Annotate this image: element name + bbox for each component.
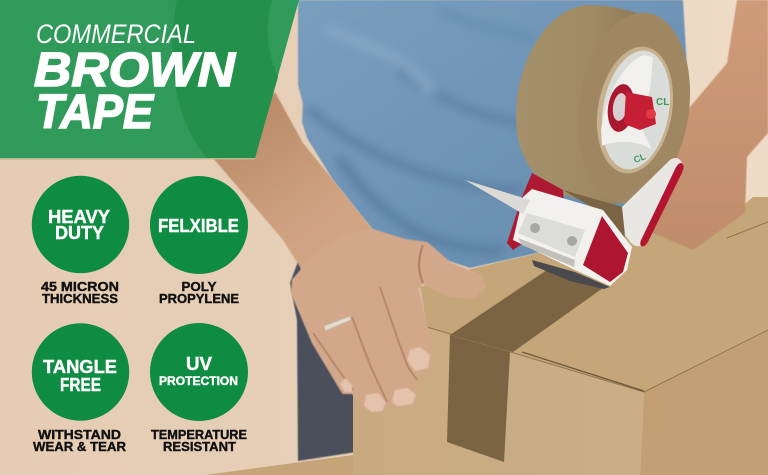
dispenser handle (622, 158, 682, 246)
badge: tangle free (32, 323, 129, 421)
box right face (640, 330, 768, 475)
blue shirt (298, 0, 690, 268)
green banner (0, 0, 299, 160)
core print: CL (656, 97, 669, 108)
hub red (605, 82, 637, 134)
caption: withstand wear and tear: WEAR & TEAR (33, 439, 127, 454)
badge: flexible: FELXIBLE (158, 216, 239, 236)
badge: heavy duty: HEAVY (48, 207, 110, 227)
tape roll: CL (632, 151, 647, 165)
caption: 45 micron thickness: 45 MICRON (41, 279, 119, 294)
caption: poly propylene: PROPYLENE (159, 291, 239, 306)
dispenser blade (465, 180, 530, 214)
left forearm (213, 92, 405, 300)
caption: temperature resistant: TEMPERATURE (151, 427, 247, 442)
box top face (420, 197, 768, 392)
back cardboard box piece (205, 455, 356, 475)
caption: 45 micron thickness (41, 279, 119, 306)
caption: withstand wear and tear: WITHSTAND (38, 427, 121, 442)
caption: withstand wear and tear (33, 427, 127, 454)
caption: poly propylene (159, 279, 239, 306)
tape roll (516, 5, 702, 211)
badge: heavy duty (32, 176, 129, 273)
trousers (290, 256, 356, 461)
caption: poly propylene: POLY (182, 279, 217, 294)
badge: uv protection: PROTECTION (159, 374, 238, 388)
brown tape strip (447, 270, 603, 462)
title: COMMERCIAL (36, 19, 196, 49)
badge: uv protection (150, 323, 248, 421)
caption: 45 micron thickness: THICKNESS (42, 291, 118, 306)
caption: temperature resistant (151, 427, 247, 454)
left hand (292, 230, 485, 413)
roll core (587, 41, 683, 179)
badge: tangle free: FREE (60, 375, 101, 395)
roll front (566, 5, 702, 211)
wedding ring (324, 316, 351, 331)
badge: flexible (150, 176, 248, 274)
badge: tangle free: TANGLE (43, 357, 117, 377)
box front face (353, 327, 644, 475)
title (34, 19, 236, 139)
badge: uv protection: UV (186, 354, 212, 374)
dispenser tape feed (563, 190, 625, 240)
title: BROWN (34, 44, 236, 97)
badge: heavy duty: DUTY (55, 223, 104, 243)
caption: temperature resistant: RESISTANT (163, 439, 236, 454)
cardboard box (353, 197, 768, 475)
dispenser body (465, 173, 632, 289)
title: TAPE (36, 86, 155, 139)
roll side (516, 5, 645, 204)
right arm and hand (645, 0, 768, 250)
